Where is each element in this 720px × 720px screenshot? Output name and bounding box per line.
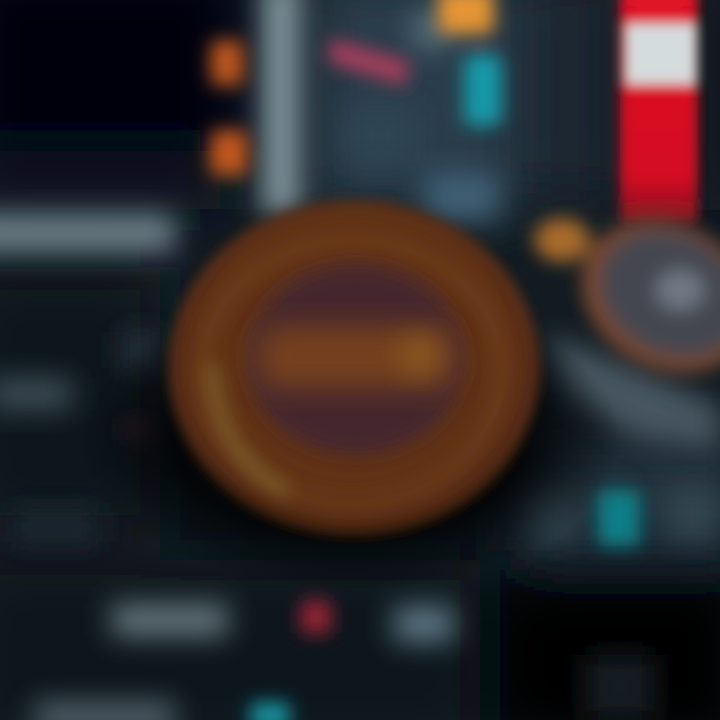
left pale blocks [0,378,72,410]
horizontal light bar [0,214,175,252]
red dot [300,600,332,634]
coloured components [122,0,640,720]
bottom teal [250,702,290,720]
coin ring highlight [212,365,288,492]
coin centre lettering glow [402,338,436,372]
coin outer ring [202,240,502,504]
teal chip [464,54,502,126]
top orange chip [438,0,494,34]
upper board highlights [425,172,500,220]
coin body [168,200,540,536]
coin centre disc [248,266,464,454]
right lower grey [548,335,720,450]
red and white striped post [620,0,698,224]
orange squares [210,40,244,86]
light vertical bar [262,0,300,215]
teal lower [598,490,640,546]
small dial at right [534,190,720,402]
coin centre band [258,326,454,388]
small dim red [122,418,158,440]
shadow beneath coin [80,290,620,590]
copper coin [168,200,540,536]
pink chip [328,38,410,86]
bottom pale blocks [112,604,228,636]
